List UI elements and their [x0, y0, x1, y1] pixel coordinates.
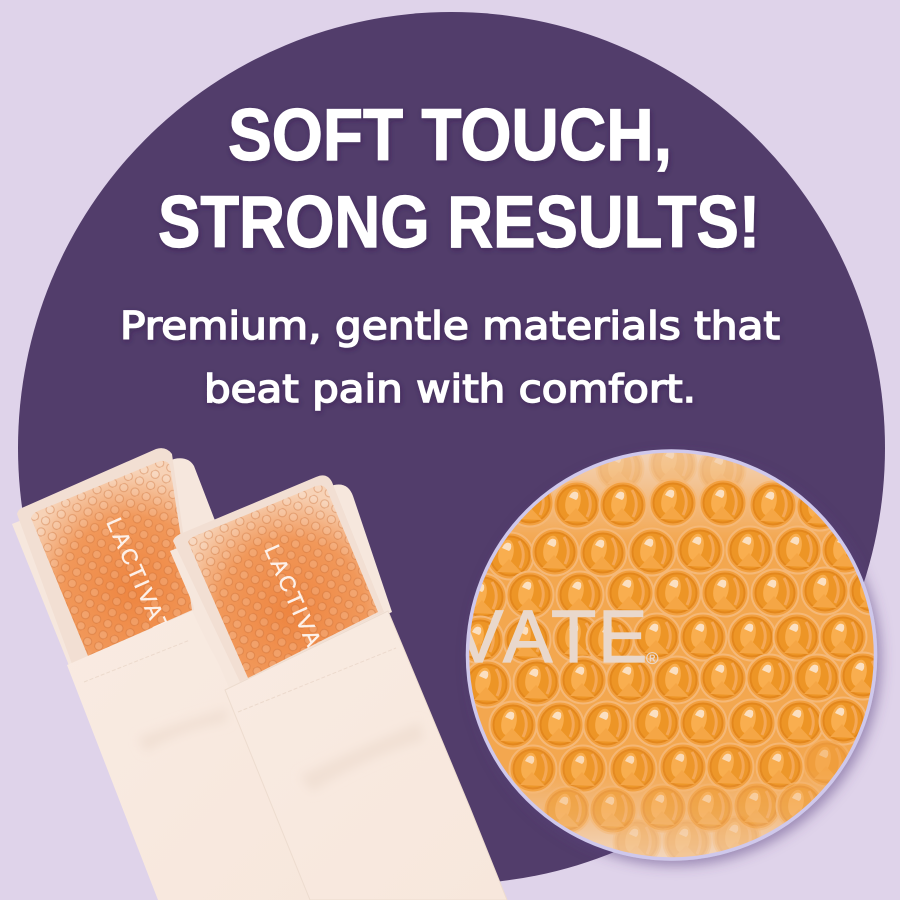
- circle border: [468, 451, 876, 859]
- magnified brand text: VATE: [454, 595, 647, 678]
- left brand text: LACTIVATE: [101, 514, 183, 655]
- heading: STRONG RESULTS!: [158, 182, 760, 263]
- right gel beads: [188, 486, 378, 678]
- heading: SOFT TOUCH,: [228, 95, 672, 176]
- left sleeve seam: [84, 640, 190, 682]
- subheading: beat pain with comfort.: [204, 367, 696, 411]
- circle base: [468, 452, 874, 858]
- subheading: Premium, gentle materials that: [120, 304, 780, 348]
- product: right gel pack: [170, 475, 507, 900]
- product: left gel pack: [12, 448, 330, 900]
- subheading: [120, 304, 780, 411]
- right fabric sleeve: [225, 611, 507, 900]
- magnified brand text: [469, 610, 658, 664]
- magnified brand text: ®: [646, 649, 659, 668]
- bead texture: [469, 452, 874, 858]
- right clear gel shell: [173, 475, 384, 682]
- right brand text: LACTIVATE: [259, 541, 341, 682]
- left clear gel shell: [17, 448, 194, 664]
- left sleeve fold: [138, 708, 228, 752]
- right sleeve fold: [300, 722, 424, 792]
- right back cloth: [170, 484, 392, 690]
- right sleeve seam: [238, 648, 396, 712]
- heading: [158, 95, 760, 263]
- magnified gel circle: [454, 440, 896, 866]
- left back cloth: [12, 458, 240, 690]
- left gel beads: [31, 461, 192, 656]
- left fabric sleeve: [67, 611, 330, 900]
